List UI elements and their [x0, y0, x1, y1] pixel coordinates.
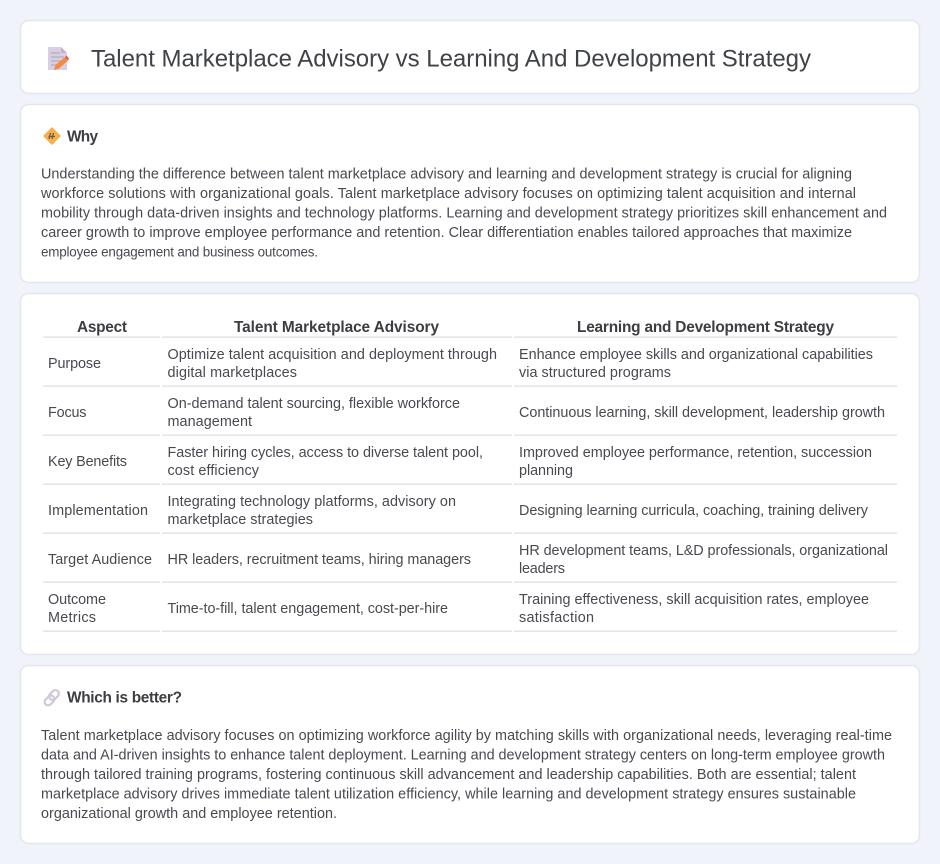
row: key benefits: cost efficiency	[168, 463, 260, 479]
row: implementation: Designing learning curricula, coaching, training delivery	[519, 503, 869, 519]
panel: which is better	[20, 666, 920, 844]
text block: which is better paragraph: organizational growth and employee retention.	[41, 806, 337, 822]
row: purpose: Purpose	[48, 356, 101, 372]
row: focus: Continuous learning, skill development, leadership growth	[519, 405, 885, 421]
table header row: Aspect	[77, 319, 127, 336]
row: target audience: leaders	[519, 561, 565, 577]
row: outcome metrics: Training effectiveness, skill acquisition rates, employee	[519, 592, 869, 608]
heading: why: Why	[67, 128, 98, 146]
row: target audience: HR leaders, recruitment teams, hiring managers	[168, 552, 471, 568]
text block: which is better paragraph: through tailored training programs, fostering continuous skill advancement and leadership capabilities. Both are essential; talent	[41, 767, 856, 783]
row: purpose: Enhance employee skills and organizational capabilities	[519, 347, 873, 363]
text block: which is better paragraph	[41, 728, 892, 822]
icon: orange diamond sign	[44, 128, 60, 144]
row: outcome metrics: Outcome	[48, 592, 106, 608]
text block: which is better paragraph: data and AI-driven insights to enhance talent deployment. Learning and development strategy centers on long-term employee growth	[41, 748, 885, 764]
row: implementation: Implementation	[48, 503, 148, 519]
row: outcome metrics: Metrics	[48, 610, 96, 626]
text block: why paragraph: mobility through data-driven insights and technology platforms. Learning and development strategy prioritizes skill enhancement and	[41, 206, 887, 222]
table header row: Learning and Development Strategy	[577, 319, 834, 336]
row: focus: management	[168, 414, 252, 430]
row: key benefits: Faster hiring cycles, access to diverse talent pool,	[168, 445, 483, 461]
icon: chain link	[43, 689, 60, 707]
text block: why paragraph: career growth to improve employee performance and retention. Clear differentiation enables tailored approaches that maximize	[41, 225, 852, 241]
heading: which is better: Which is better?	[67, 690, 182, 706]
panel: why	[20, 104, 920, 282]
row: target audience	[48, 543, 888, 577]
row: key benefits: Key Benefits	[48, 454, 127, 470]
row: key benefits: planning	[519, 463, 573, 479]
text block: which is better paragraph: Talent marketplace advisory focuses on optimizing workforce agility by matching skills with organizational needs, leveraging real-time	[41, 728, 892, 744]
row: outcome metrics: satisfaction	[519, 610, 594, 626]
row: implementation: marketplace strategies	[168, 512, 313, 528]
row: target audience: HR development teams, L&D professionals, organizational	[519, 543, 888, 559]
text block: why paragraph: Understanding the difference between talent marketplace advisory and learning and development strategy is crucial for aligning	[41, 166, 852, 182]
row: purpose: digital marketplaces	[168, 365, 297, 381]
icon: memo with pencil	[48, 47, 69, 70]
row: key benefits: Improved employee performance, retention, succession	[519, 445, 872, 461]
text block: why paragraph: employee engagement and business outcomes.	[41, 244, 318, 260]
row: focus: On-demand talent sourcing, flexible workforce	[168, 396, 460, 412]
row: purpose: Optimize talent acquisition and deployment through	[168, 347, 497, 363]
row: focus	[48, 396, 885, 430]
text block: why paragraph	[40, 166, 887, 260]
panel: comparison table	[20, 294, 920, 654]
row: focus: Focus	[48, 405, 86, 421]
row: target audience: Target Audience	[48, 552, 152, 568]
row: purpose	[48, 347, 873, 381]
row: outcome metrics: Time-to-fill, talent engagement, cost-per-hire	[168, 601, 448, 617]
row: implementation: Integrating technology platforms, advisory on	[168, 494, 456, 510]
title: Talent Marketplace Advisory vs Learning And Development Strategy	[91, 46, 811, 72]
panel: title header	[20, 20, 920, 94]
table header row	[77, 319, 834, 336]
row: implementation	[48, 494, 869, 528]
text block: why paragraph: workforce solutions with organizational goals. Talent marketplace advisory focuses on optimizing talent acquisition and internal	[40, 186, 856, 202]
table header row: Talent Marketplace Advisory	[234, 319, 439, 336]
row: purpose: via structured programs	[519, 365, 671, 381]
row: key benefits	[48, 445, 872, 479]
row: outcome metrics	[48, 592, 869, 626]
text block: which is better paragraph: marketplace advisory drives immediate talent utilization efficiency, while learning and development strategy ensures sustainable	[41, 786, 856, 802]
